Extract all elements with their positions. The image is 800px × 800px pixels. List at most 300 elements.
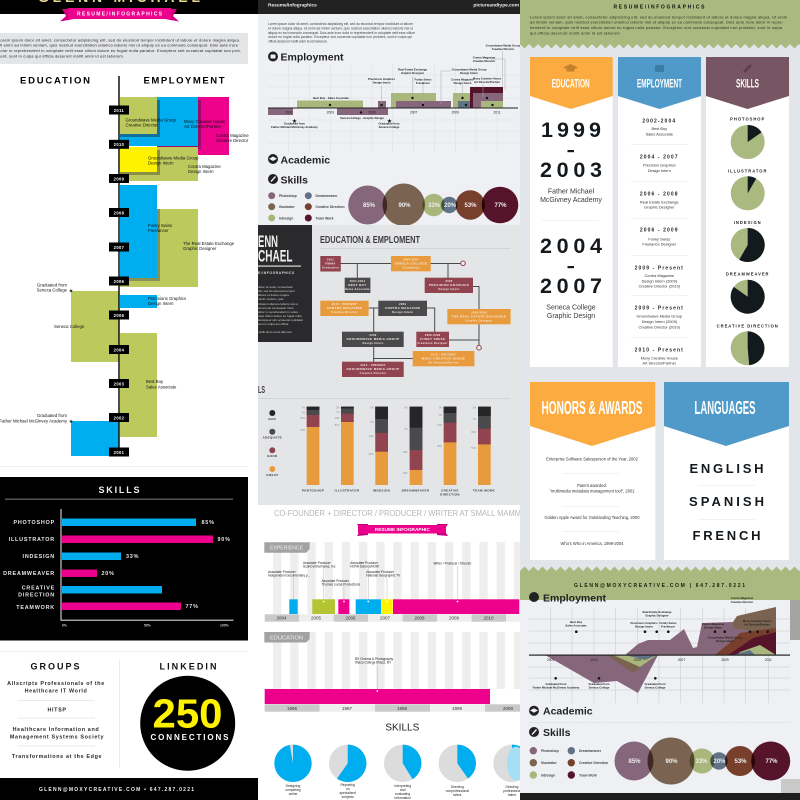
stacked bar chart: 7% [439, 414, 443, 417]
stacked bar chart: 3% [439, 406, 443, 410]
employment chart: Contra Magazine [473, 56, 496, 60]
org chart boxes: FMMA [325, 262, 336, 266]
skills header: SKILLS [736, 78, 759, 90]
skills heading: SKILLS [98, 485, 140, 495]
panel: linkedin connections [140, 662, 235, 771]
panel: column resume [520, 0, 800, 600]
timeline blocks [71, 97, 229, 456]
employment chart: Funky Swiss [415, 78, 432, 82]
area chart [529, 607, 790, 703]
stacked bar chart: 15% [471, 431, 477, 434]
stacked bar chart: 10% [369, 435, 374, 438]
education dates: Graphic Design [547, 313, 595, 320]
education header [530, 57, 613, 109]
org chart boxes: Sales Associate [345, 287, 370, 291]
area chart: Design Intern [635, 624, 653, 628]
honors list: Patent awarded: [577, 483, 607, 488]
stacked chart legend: GOOD [267, 454, 278, 458]
org chart boxes: CONTRA MAGAZINE [385, 306, 420, 310]
experience year band [265, 614, 520, 622]
stacked bar chart: DIRECTION [440, 492, 460, 496]
skills legend: Creative Direction [316, 205, 345, 209]
timeline labels: Creative Director [216, 138, 249, 143]
employment chart: Best Buy - Sales Associate [313, 96, 349, 100]
employment chart: Art Director/Partner [474, 80, 501, 84]
experience year band: 2004 [276, 616, 287, 621]
org chart boxes: Design Intern [362, 341, 384, 345]
employment chart: Design Intern [373, 80, 391, 84]
experience leaders and labels: Associate Producer [350, 561, 379, 565]
employment chart: Graduated from [284, 122, 306, 126]
org chart boxes: Art Director/Partner [428, 360, 459, 364]
area chart: Seneca College [645, 686, 666, 690]
intro text block: dolor in reprehenderit in voluptate velit esse cillum dolore eu fugiat nulla pariatur. Excepteur sint occaecat cupidatat non proi- [0, 48, 242, 53]
experience leaders and labels: Associate Producer [322, 579, 350, 583]
experience year band: 2009 [449, 616, 460, 621]
experience leaders and labels: Associate Producer [268, 570, 297, 574]
bar labels: CREATIVE [22, 586, 55, 592]
experience leaders and labels: Associate Producer [303, 561, 332, 565]
top green banner: RESUME/INFOGRAPHICS [614, 4, 705, 10]
experience label: EXPERIENCE [270, 546, 303, 552]
education year band: 2000 [503, 706, 514, 711]
stacked bar chart: 7% [473, 418, 477, 421]
bar labels: ILLUSTRATOR [9, 537, 55, 543]
area chart: Design Intern [716, 639, 734, 643]
timeline labels: Creative Director [126, 122, 158, 128]
intro text block: Lorem ipsum dolor sit amet, consectetur adipisicing elit, sed do eiusmod tempor incididunt ut labore et dolore magna aliqua. [0, 38, 240, 42]
employment chart: Seneca College [379, 125, 400, 129]
dark header [258, 0, 520, 14]
employment chart: Real Estate Exchange [398, 68, 427, 72]
skills bubbles: 90% [398, 203, 411, 209]
stacked bar chart: 3% [404, 406, 408, 410]
area chart: Graduated from [589, 682, 610, 686]
top green banner [520, 0, 800, 48]
area chart: Seneca College [589, 686, 610, 690]
panel: languages [664, 382, 789, 560]
pie labels [285, 783, 521, 800]
dark name box: elit, sed do eiusmod tempor [258, 289, 295, 293]
skills pies [717, 117, 779, 365]
area chart: Graduated from [645, 682, 666, 686]
timeline labels: Art Director/Partner [184, 124, 222, 129]
employment chart: Graduated from [379, 122, 400, 126]
panel: groups list: Healthcare Information and [13, 727, 99, 733]
org chart boxes: 2004-2007 [403, 258, 419, 262]
heading: employment clipped: Contra Magazine [731, 596, 754, 600]
pie labels: Designing [286, 784, 300, 788]
footer green band [520, 566, 800, 600]
org chart boxes: 2010 - PRESENT [332, 302, 357, 306]
panel: groups list: HITSP [47, 708, 67, 714]
pie labels: and [400, 788, 406, 792]
bar labels: 100% [220, 624, 229, 628]
employment entries: Design Intern (2009) [642, 319, 678, 324]
stacked bar chart: TEAM WORK [473, 488, 495, 492]
dark name box: esse cillum dolore eu fugiat nulla [258, 314, 302, 318]
education year band: 1997 [342, 706, 353, 711]
panel: linkedin connections: CONNECTIONS [150, 733, 229, 742]
education dates: 1999 [541, 118, 601, 142]
stacked chart legend: ADEQUATE [263, 436, 282, 440]
timeline labels: Graduated from [37, 282, 67, 288]
experience leaders and labels: Writer / Producer / Director [434, 562, 472, 566]
org chart boxes: FUNKY SWISS [420, 337, 445, 341]
org chart boxes: 2006-2008 [471, 310, 487, 314]
employment chart: Precisions Graphics [368, 77, 395, 81]
area chart: Father Michael McGinvey Academy [533, 686, 580, 690]
heading: education and employment: EDUCATION & EMPLOMENT [320, 235, 420, 246]
education dates: Seneca College [546, 304, 596, 312]
org chart boxes: 2009 [399, 302, 406, 306]
timeline axis with years: 2005 [114, 313, 125, 318]
timeline labels: Graduated from [37, 413, 67, 418]
stacked bar chart: 3% [302, 406, 306, 410]
education year band: 1999 [452, 706, 463, 711]
dark name box: Excepteur sint occaecat cupidatat [258, 318, 303, 322]
pie labels: Directing [451, 785, 464, 789]
dark name box: E/INFOGRAPHICS [258, 271, 295, 275]
employment chart: Groundwave Media Group [486, 44, 521, 48]
honors heading: HONORS & AWARDS [542, 398, 642, 418]
column: education [530, 57, 613, 367]
employment chart: Creative Director [473, 59, 496, 63]
heading: skills [268, 174, 308, 184]
timeline axis with years: 2006 [114, 279, 125, 284]
top green banner: qui officia deserunt mollit anim id est laborum. [530, 30, 621, 35]
employment chart: Design Intern [454, 81, 472, 85]
dark name box: ENN [258, 232, 278, 251]
panel: honors and awards [530, 382, 655, 560]
bar labels: 0% [62, 624, 67, 628]
pie labels: information [395, 796, 411, 800]
languages list: FRENCH [692, 528, 760, 543]
employment chart: 2003 [327, 110, 334, 114]
dark name box [258, 225, 312, 342]
bar labels: 20% [102, 571, 115, 577]
education year band: 1996 [287, 706, 298, 711]
intro text block: dent, sunt in culpa qui officia deserunt mollit anim id est laborum. [0, 53, 124, 58]
employment entries: Moxy Creative House [641, 356, 678, 361]
footer green band: GLENN@MOXYCREATIVE.COM | 647.287.0221 [574, 583, 745, 589]
stacked bar chart: 10% [403, 451, 408, 454]
employment chart: Seneca College - Graphic Design [340, 116, 384, 120]
education dates: 2007 [540, 274, 602, 298]
intro text block: Ut enim ad minim veniam, quis nostrud exercitation ullamco laboris nisi ut aliquip ex ea commodo consequat. Duis aute irure [0, 43, 239, 48]
timeline axis with years: 2004 [114, 347, 125, 352]
honors list: Who's Who in America, 1999-2004 [561, 541, 624, 546]
heading: academic: Academic [280, 154, 330, 166]
education dates: 2004 [540, 234, 602, 258]
panel: org chart resume [258, 225, 520, 505]
employment chart: 2011 [493, 110, 501, 114]
education dates [540, 118, 602, 320]
linkedin heading: LINKEDIN [160, 662, 216, 672]
timeline labels: Groundwave Media Group [126, 118, 177, 122]
employment entries: Sales Associate [646, 131, 673, 136]
skills pies [274, 745, 531, 782]
employment entries: 2009 - Present [635, 305, 684, 311]
education dates: McGivney Academy [540, 197, 602, 204]
dark header: Resume/Infographics [268, 2, 317, 8]
education label: EDUCATION [270, 636, 303, 642]
honors list [545, 456, 640, 546]
skills heading: SKILLS [385, 722, 420, 734]
dark name box: rcitation ullamco laboris nisi ut [258, 302, 298, 306]
area chart: Groundwave Media Group [708, 636, 743, 640]
honors list: "multimedia metadata management tool", 2001 [549, 488, 635, 494]
area chart: Best Buy [570, 620, 583, 624]
heading: academic: Academic [543, 706, 593, 718]
bar labels: 33% [126, 554, 139, 560]
panel: groups list: Healthcare IT World [25, 688, 87, 694]
skills legend: Team Work [579, 773, 597, 777]
experience label [264, 542, 310, 553]
panel: skills bar chart [0, 477, 248, 640]
org chart boxes: Design Intern [438, 287, 460, 291]
timeline labels: Funky Swiss [148, 223, 172, 228]
org chart boxes: SENECA COLLEGE [394, 262, 428, 266]
stacked bar chart: 57% [471, 447, 477, 450]
timeline axis with years [109, 76, 129, 456]
stacked bar chart: 2% [336, 406, 340, 410]
employment entries: 2004 - 2007 [640, 154, 679, 160]
area chart: Sales Associate [565, 624, 587, 628]
dark name box: dolor in reprehenderit in volup- [258, 310, 299, 314]
stacked bar chart: 3% [370, 406, 374, 410]
panel: employment timeline resume (bars) [258, 0, 531, 800]
heading: employment: Employment [280, 52, 344, 64]
stacked bar chart: 15% [300, 417, 306, 420]
stacked chart legend: BAD [269, 417, 277, 421]
timeline labels: Freelancer [148, 228, 169, 233]
bar labels: TEAMWORK [16, 605, 55, 611]
stacked bar chart: DREAMWEAVER [402, 488, 430, 492]
experience year band: 2006 [345, 616, 356, 621]
stacked chart legend [263, 410, 282, 477]
light blue pie remnant [507, 746, 525, 780]
stacked bar chart: 81% [335, 424, 340, 427]
honors list: Golden Apple Award for Outstanding Teaching, 2000 [545, 515, 640, 520]
area chart: 2001 [547, 658, 555, 662]
stacked bar chart: 7% [370, 421, 374, 424]
divider [0, 466, 248, 467]
org chart boxes: Creative Director [360, 371, 386, 375]
timeline labels: Seneca College [54, 324, 85, 329]
pie labels: specialized [340, 791, 356, 795]
org chart connectors [340, 261, 481, 362]
stacked bar chart: CREATIVE [441, 488, 459, 492]
stacked bar chart: 3% [473, 406, 477, 410]
stacked bar chart: 10% [437, 424, 443, 427]
area chart: 2003 [590, 658, 598, 662]
ribbon: resume infographics [60, 8, 179, 22]
heading: skills [529, 727, 571, 739]
stacked bar chart: 7% [336, 411, 340, 414]
org chart boxes: 2009 [369, 333, 377, 337]
employment header: EMPLOYMENT [637, 78, 682, 90]
heading: employment clipped: Employment [543, 592, 607, 604]
skills legend: Dreamweaver [579, 749, 602, 753]
education dates: Father Michael [548, 189, 595, 196]
timeline labels: ★ [69, 419, 74, 425]
timeline axis with years: 2001 [114, 450, 125, 455]
bars [60, 509, 234, 621]
experience leaders and labels: National Geographic TV [366, 574, 401, 578]
stacked bar chart: 7% [404, 428, 408, 431]
area chart: Precisions Graphics [630, 621, 658, 625]
area chart: Contra Magazine [702, 622, 725, 626]
dark name box: dolor sit amet, consectetur [258, 285, 293, 289]
experience leaders and labels: Thomas Lucas Productions [322, 582, 361, 586]
experience leaders and labels: Independent documentary p... [268, 574, 310, 578]
stacked bar chart [300, 406, 495, 496]
languages list [689, 461, 764, 543]
pie labels: Reporting [341, 783, 355, 787]
timeline axis with years: 2011 [114, 108, 125, 113]
org chart boxes: 2001-2004 [350, 279, 365, 283]
employment chart: 2001 [285, 110, 293, 114]
timeline labels: Precisions Graphics [148, 296, 186, 301]
timeline labels: Moxy Creative House [184, 119, 226, 124]
top green banner: ad minim veniam, quis nostrud exercitation ullamco laboris nisi ut aliquip ex ea commodo consequat. Duis aute irure dolor in repre- [530, 20, 784, 25]
experience leaders and labels [268, 561, 472, 602]
panel: employment area chart resume [520, 592, 800, 800]
area chart: Funky Swiss [660, 621, 677, 625]
skills legend: InDesign [279, 216, 293, 220]
column: employment [618, 57, 701, 367]
employment chart: ★ [292, 118, 297, 125]
panel: black timeline resume [0, 0, 258, 800]
area chart: 2009 [721, 658, 729, 662]
pie labels: on [346, 787, 350, 791]
top green banner: Lorem ipsum dolor sit amet, consectetur adipisicing elit, sed do eiusmod tempor incididunt ut labore et dolore magna aliqua. Ut enim [530, 14, 787, 20]
timeline labels: Graphic Designer [183, 246, 217, 251]
panel: groups list: Allscripts Professionals of the [7, 681, 105, 687]
org chart boxes: GROUNDWAVE MEDIA GROUP [347, 367, 399, 371]
employment entries: Real Estate Exchange [640, 200, 679, 205]
area chart: Design Intern [704, 626, 722, 630]
panel: experience timeline resume [258, 505, 531, 800]
employment chart: Father Michael McGinvey Academy [271, 125, 318, 129]
stacked bar chart: 55% [437, 445, 443, 448]
org chart boxes: 2001 [327, 258, 334, 262]
org chart boxes: MOXY CREATIVE HOUSE [422, 356, 465, 360]
languages list: SPANISH [689, 494, 764, 509]
skills legend: Photoshop [541, 749, 559, 753]
heading: employment clipped: Creative Director [731, 600, 754, 604]
area chart: 2011 [765, 658, 772, 662]
skills legend: InDesign [541, 773, 555, 777]
heading: employment: EMPLOYMENT [144, 76, 225, 86]
timeline axis with years: 2007 [114, 245, 125, 250]
stacked bar chart: 20% [403, 472, 408, 475]
experience leaders and labels: NOVA ScienceNOW [350, 564, 379, 568]
skills pies: ILLUSTRATOR [728, 168, 767, 173]
pie labels: Interpreting [394, 784, 411, 788]
experience stripes [273, 542, 520, 614]
bar labels: DIRECTION [18, 592, 55, 598]
skills legend: Illustrator [541, 761, 557, 765]
dark name box: mollit anim id est laborum. [258, 330, 293, 334]
timeline labels: Seneca College [37, 288, 68, 293]
experience year band: 2007 [380, 616, 391, 621]
pie labels: competing [285, 788, 301, 792]
employment entries: 2006 - 2009 [640, 228, 679, 234]
skills legend: Team Work [316, 216, 334, 220]
skills bubbles: 33% [695, 759, 708, 765]
intro paragraph [268, 22, 415, 43]
skills pies: PHOTOSHOP [730, 117, 765, 122]
employment entries: Funky Swiss [648, 236, 670, 241]
area chart: 2007 [678, 658, 685, 662]
skills legend: Illustrator [279, 205, 295, 209]
education header: EDUCATION [552, 78, 590, 90]
experience year band: 2008 [414, 616, 425, 621]
org chart boxes: 2010 - PRESENT [431, 352, 456, 356]
area chart: Moxy Creative House [743, 619, 772, 623]
experience leaders and labels: Associate Producer [366, 570, 395, 574]
bar labels: 90% [218, 537, 231, 543]
org chart boxes: BEST BUY [348, 283, 367, 287]
heading: skills: Skills [543, 727, 571, 739]
bar labels: INDESIGN [23, 554, 55, 560]
experience blocks [289, 599, 520, 614]
area chart: 2005 [634, 658, 641, 662]
pie labels: subjects [342, 795, 354, 799]
employment entries: 2009 - Present [635, 265, 684, 271]
area chart: Graphic Designer [645, 614, 670, 618]
pie labels: online [289, 792, 298, 796]
skills bubbles: 33% [428, 203, 441, 209]
intro paragraph: et dolore magna aliqua. Ut enim ad minim veniam, quis nostrud exercitation ullamco laboris nisi ut [268, 26, 413, 30]
bar labels: DREAMWEAVER [3, 571, 55, 577]
dark name box: commodo consequat. Duis [258, 306, 294, 310]
heading: education: EDUCATION [20, 76, 90, 86]
timeline labels [0, 118, 249, 425]
dark header: pictureandtype.com [473, 2, 519, 8]
top green banner: henderit in voluptate velit esse cillum dolore eu fugiat nulla pariatur. Excepteur sint occaecat cupidatat non proident, sunt in culpa [530, 25, 783, 30]
skills bubbles: 53% [734, 759, 747, 765]
employment entries: Best Buy [652, 126, 667, 131]
employment chart: 2005 [368, 110, 376, 114]
ribbon: resume infographic [357, 524, 448, 536]
employment entries: 2006 - 2008 [640, 192, 679, 198]
skills bubbles: 53% [464, 203, 477, 209]
org chart boxes: 2005 [445, 279, 453, 283]
timeline labels: Design Intern [148, 160, 174, 166]
org chart boxes: Graphic Designer [465, 318, 493, 322]
education bar: Ithaca College Ithaca, NY [355, 660, 392, 664]
employment header [618, 57, 701, 109]
skills bubbles: 20% [444, 203, 457, 209]
skills pies: INDESIGN [734, 220, 762, 225]
pie labels: professional [503, 789, 521, 793]
employment chart [268, 44, 521, 153]
org chart boxes: Graduation [402, 266, 420, 270]
employment entries: Graphic Designer [644, 205, 675, 210]
employment chart: Freelancer [416, 81, 431, 85]
employment entries: Precision Graphics [643, 163, 676, 168]
timeline labels: Groundwave Media Group [148, 156, 199, 160]
skills bubbles: 90% [665, 759, 678, 765]
dark name box: sunt in culpa qui officia [258, 322, 289, 326]
heading: employment clipped [529, 592, 754, 604]
education bar: BS Cinema & Photography [355, 657, 394, 661]
skills legend: Creative Direction [579, 761, 608, 765]
bar labels: 85% [202, 520, 215, 526]
